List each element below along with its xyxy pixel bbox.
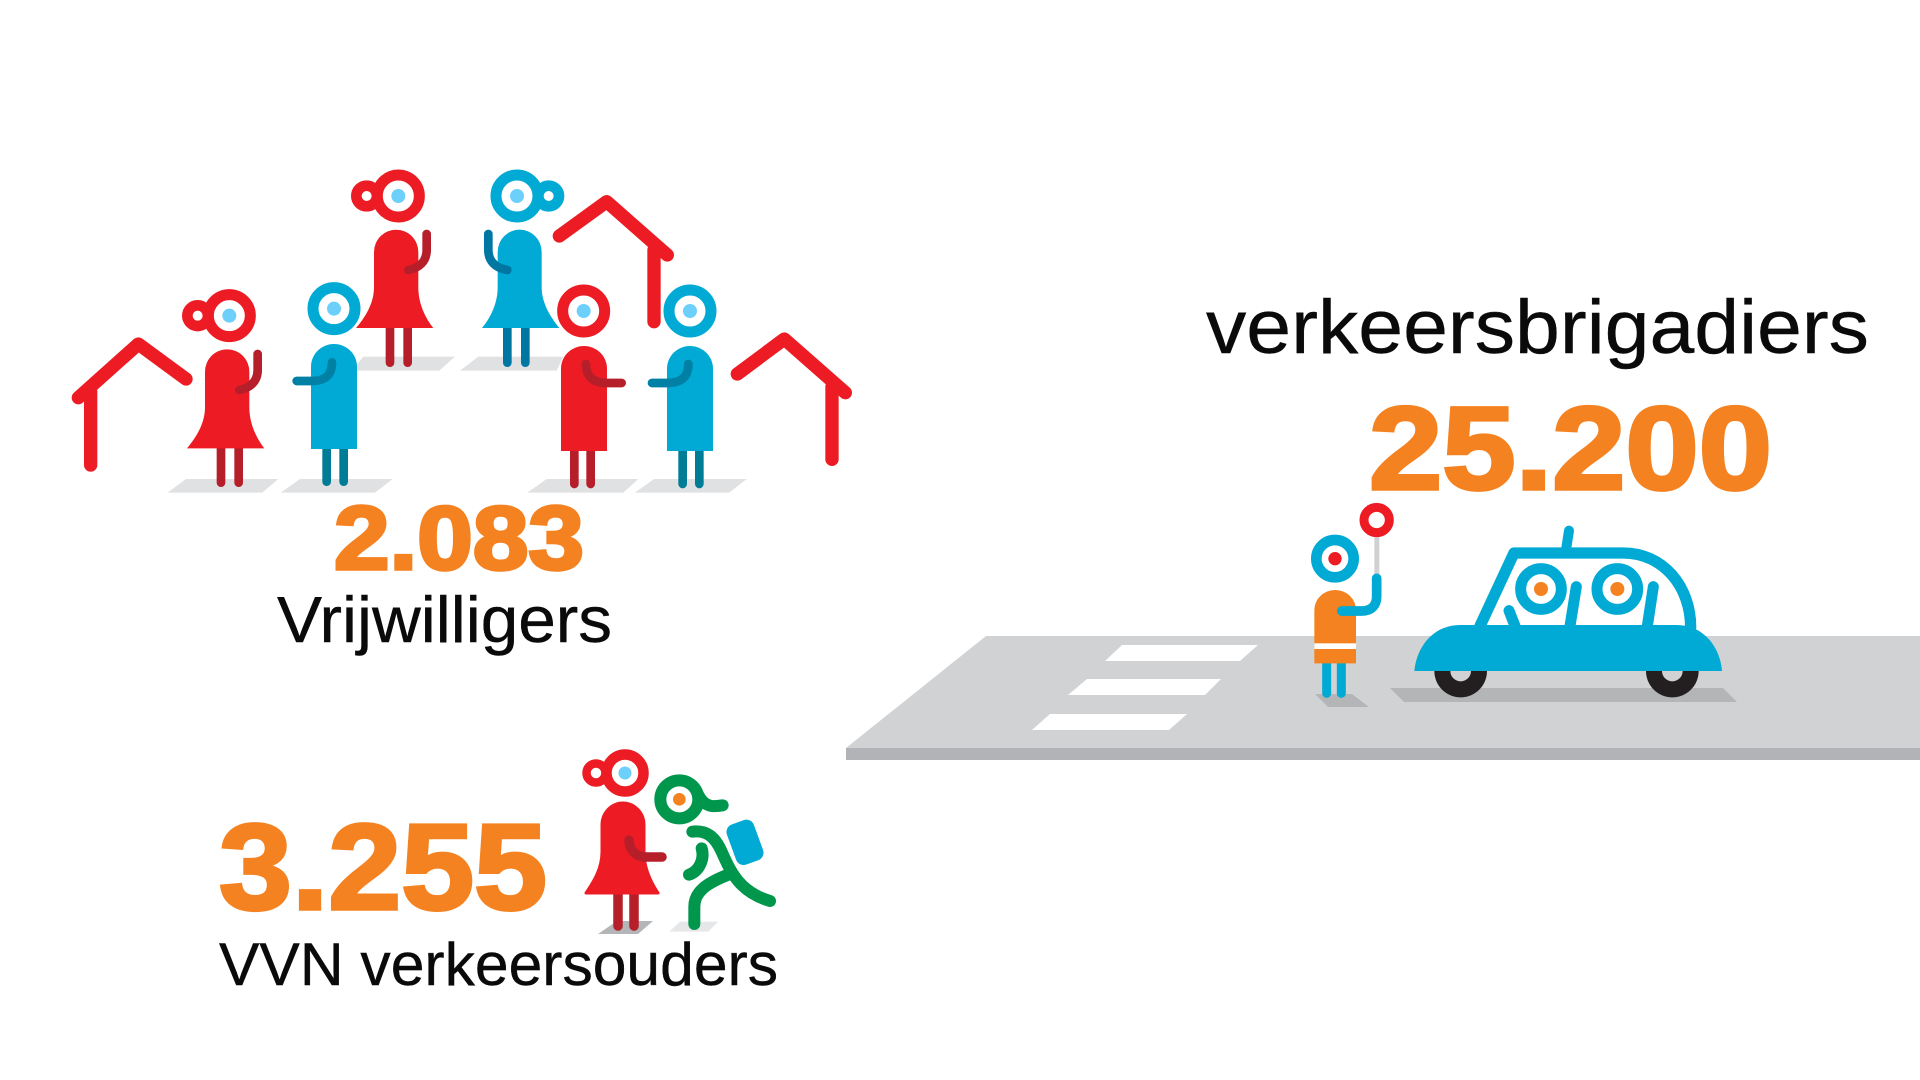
man: red, front middle [561,290,622,484]
illustration: parent and child [586,754,770,934]
shadow: guard [1315,694,1369,707]
woman: red, front row [187,295,264,483]
icon: house right [737,339,845,459]
label: traffic parents: VVN verkeersouders [219,931,778,998]
crosswalk stripes [1032,645,1258,730]
figure: parent [586,754,662,926]
road with crossing [846,636,1920,760]
woman: blue, back row [482,175,559,363]
shadow: child [669,922,718,932]
man: blue, front right [652,290,713,484]
title: crossing guards: verkeersbrigadiers [1206,285,1869,370]
number: traffic parents: 3.255 [219,799,547,935]
man: blue, front left [297,288,357,482]
icon: house left [78,344,186,465]
ground shadows [168,357,747,493]
shadow: parent [598,921,653,934]
label: volunteers: Vrijwilligers [277,583,612,656]
figure: child with backpack [660,780,770,932]
number: volunteers: 2.083 [334,489,584,589]
number: crossing guards: 25.200 [1369,383,1772,515]
woman: red, back row [356,175,433,363]
icon: house middle [559,202,667,322]
figure: crossing guard [1314,507,1389,693]
icon: car [1414,531,1722,697]
illustration: crossing guard and car [1314,507,1722,697]
illustration: volunteers and houses [78,175,845,493]
shadow: car [1390,688,1737,702]
